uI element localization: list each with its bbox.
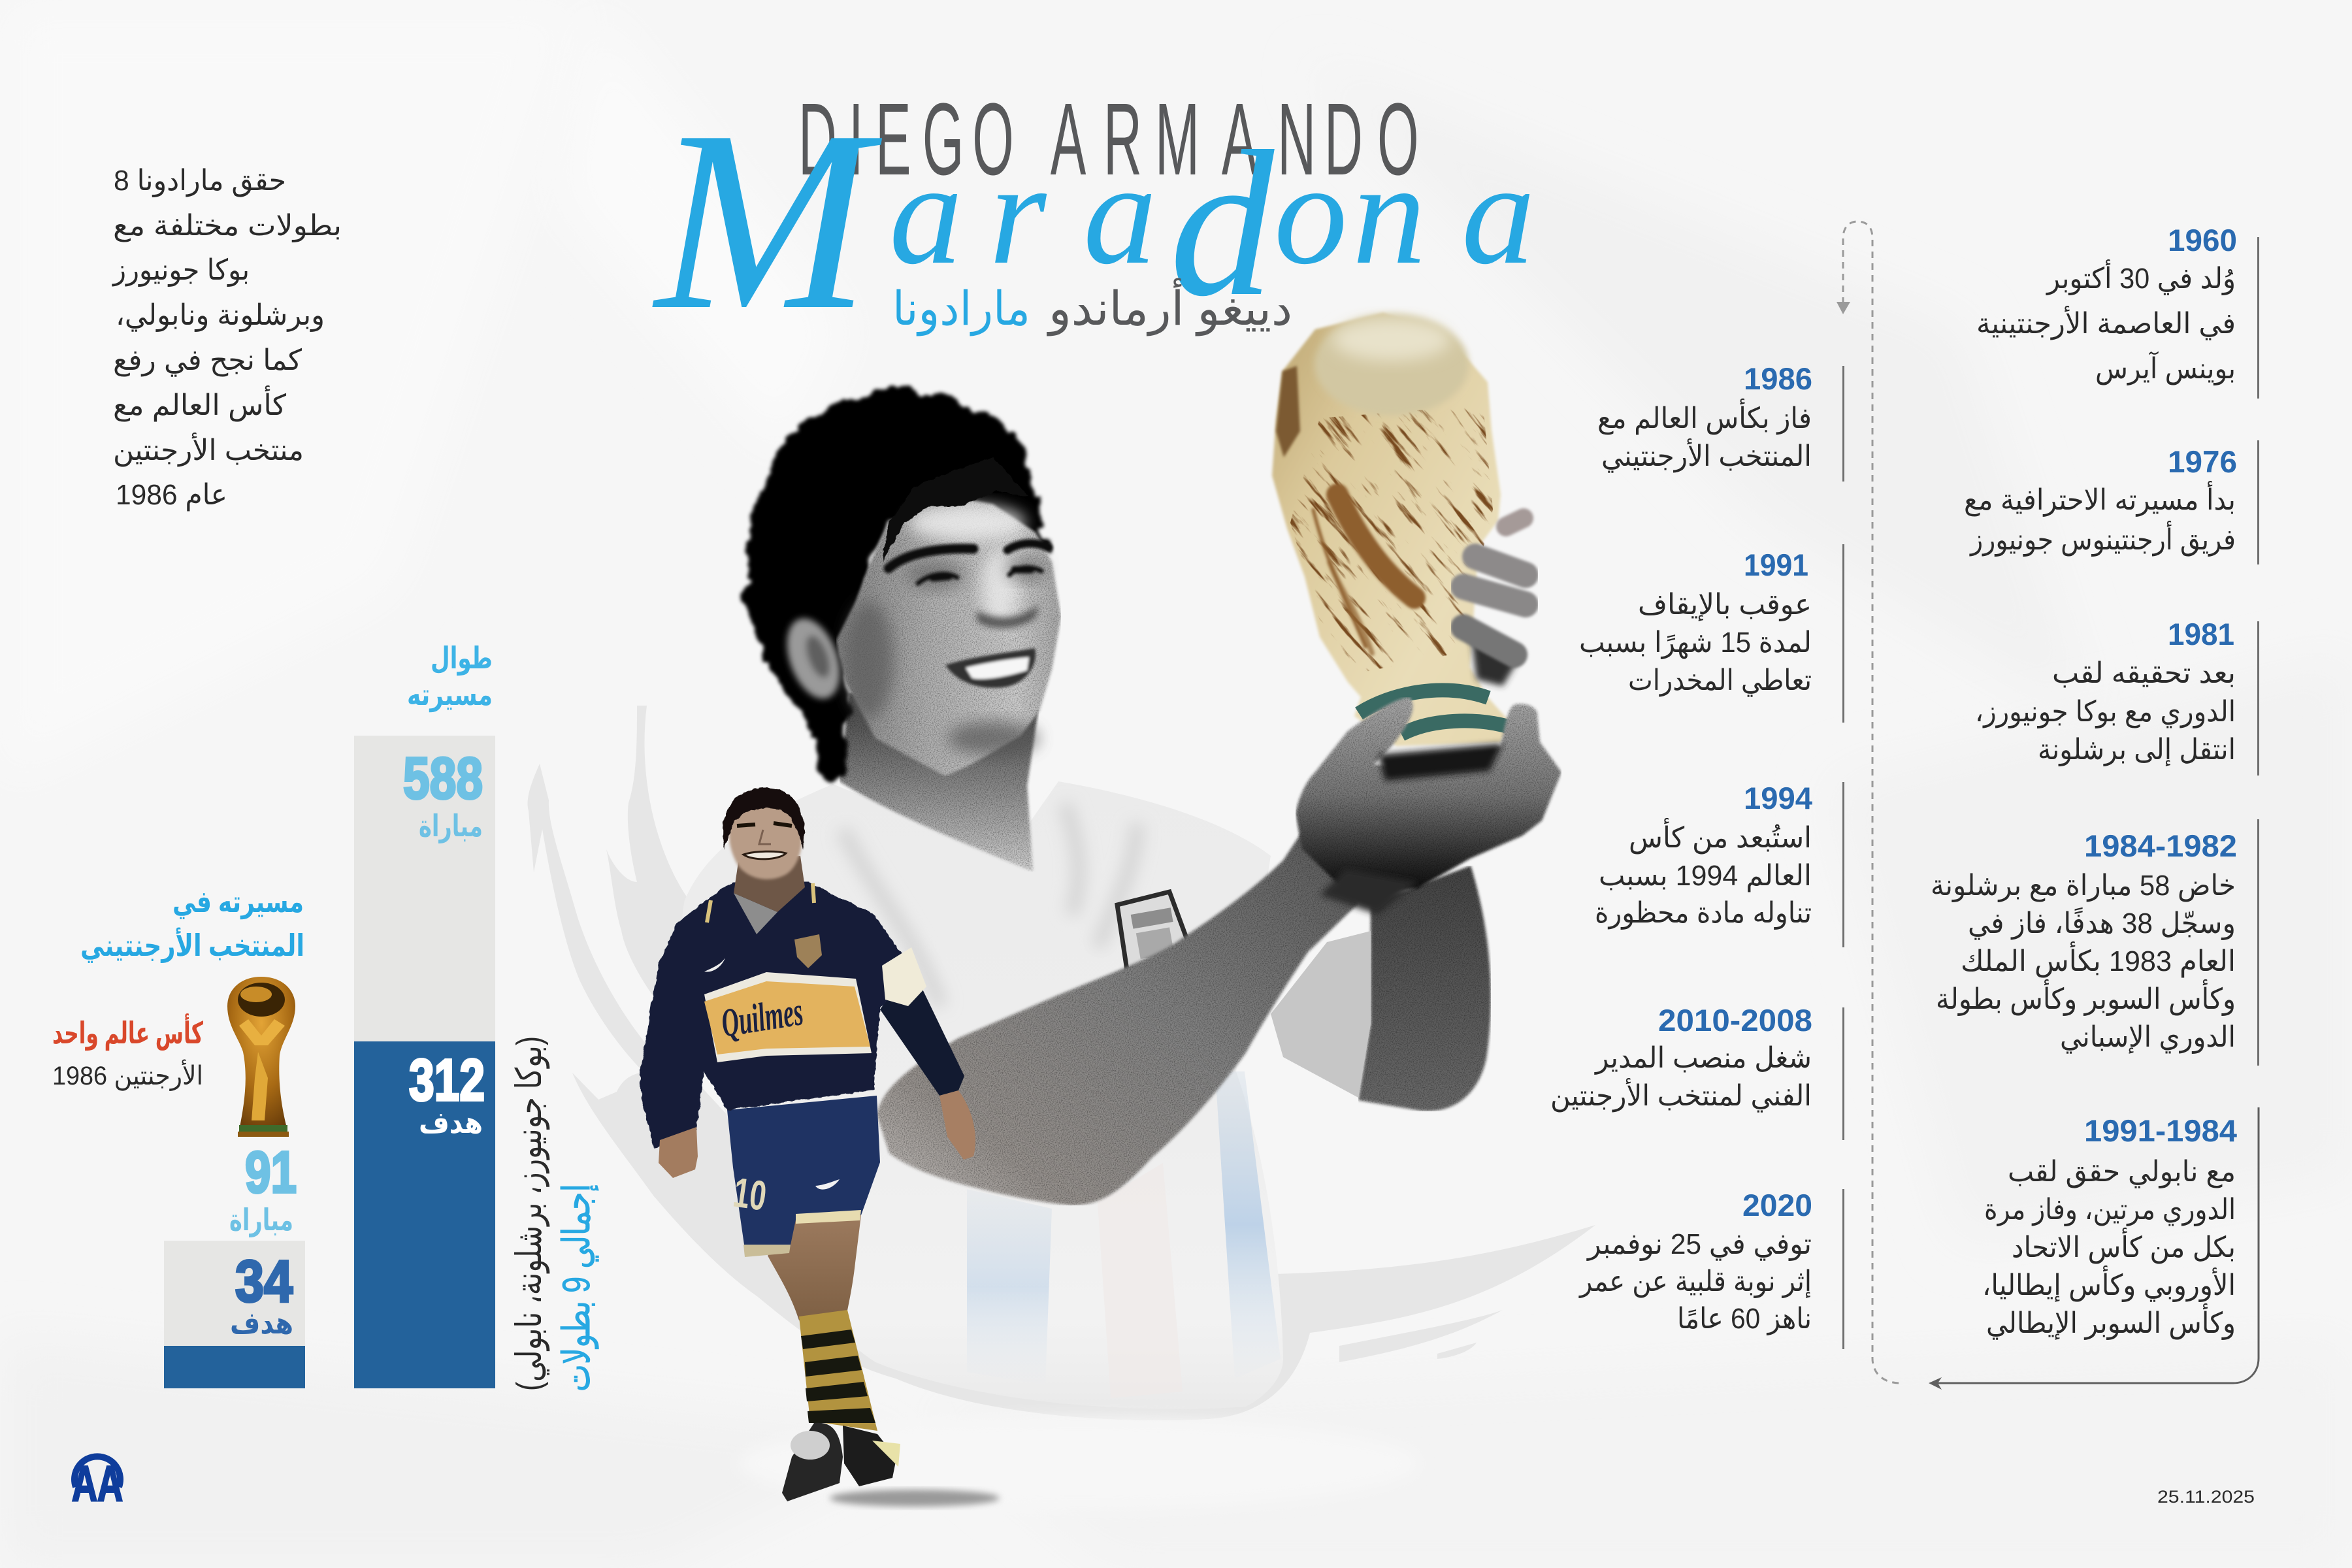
captain armband: [882, 947, 926, 1006]
heading: national team: مسيرته في: [172, 885, 304, 919]
item: 1994: 1994: [1744, 781, 1812, 815]
item: 1984-1982: وكأس السوبر وكأس بطولة: [1936, 979, 2236, 1016]
number 91: 91: [245, 1140, 297, 1205]
vertical text: clubs: (بوكا جونيورز، برشلونة، نابولي): [510, 1036, 549, 1391]
left hand: [659, 1127, 698, 1178]
short hem and number: 10: [730, 1169, 770, 1220]
back of hand behind fingers: [1470, 627, 1522, 686]
heading: national team: [80, 885, 304, 963]
logo: Anadolu Agency: AA: [72, 1456, 123, 1512]
label goals: هدف: [419, 1105, 483, 1139]
stats: whole career: [354, 641, 495, 1388]
brush swoosh: [528, 706, 1595, 1420]
shirt blue stripes: [967, 1071, 1281, 1398]
arrow head left: [1929, 1377, 1942, 1390]
bar: goals: [164, 1346, 305, 1388]
face shading: [844, 504, 1047, 755]
face: [836, 498, 1061, 776]
number 588: 588: [403, 746, 483, 811]
arrow head down: [1837, 302, 1850, 314]
ear: [777, 612, 850, 706]
shirt folds: [843, 804, 1137, 1006]
bar: goals: [354, 1041, 495, 1388]
intro paragraph: عام 1986: [116, 479, 227, 512]
item: 1981: الدوري مع بوكا جونيورز،: [1975, 696, 2236, 728]
boots: [782, 1423, 900, 1501]
hair small: [723, 788, 804, 849]
heading: whole career: طوال: [431, 641, 493, 676]
right forearm sleeve: [880, 966, 964, 1096]
item: 1991: [1579, 544, 1844, 723]
shadow under trophy base: [1379, 743, 1503, 781]
intro paragraph: كما نجح في رفع: [113, 344, 302, 377]
vertical text: total titles: إجمالي 9 بطولات: [555, 1184, 599, 1392]
trophy engraving: [1313, 495, 1414, 653]
title: Maradona script: d: [1169, 108, 1277, 340]
item: 2010-2008: الفني لمنتخب الأرجنتين: [1550, 1077, 1812, 1113]
item: 1991-1984: [1982, 1113, 2237, 1340]
trophy dark side: [1276, 366, 1300, 457]
item: 1976: بدأ مسيرته الاحترافية مع: [1964, 481, 2236, 517]
item: 2010-2008: [1550, 1003, 1844, 1140]
item: 1960: [1976, 223, 2259, 399]
item: 2010-2008: 2010-2008: [1658, 1003, 1812, 1037]
item: 1994: [1595, 781, 1844, 947]
main photo: Maradona lifting the trophy: [682, 305, 1625, 1409]
world cup trophy: [1158, 305, 1625, 773]
item: 1991: عوقب بالإيقاف: [1638, 589, 1812, 621]
forearm: [877, 832, 1358, 1205]
trophy veins: [1158, 305, 1625, 773]
intro paragraph: حقق مارادونا 8: [114, 165, 286, 197]
eyebrows and eyes: [889, 544, 1049, 583]
intro paragraph: منتخب الأرجنتين: [113, 432, 304, 467]
item: 1994: استُبعد من كأس: [1629, 817, 1812, 855]
item: 1981: انتقل إلى برشلونة: [2038, 734, 2236, 766]
jersey badge: [794, 934, 822, 968]
small photo: Maradona in Boca Juniors kit: [640, 788, 1000, 1507]
item: 1960: في العاصمة الأرجنتينية: [1976, 305, 2236, 340]
label goals: هدف: [230, 1306, 293, 1340]
intro paragraph: بطولات مختلفة مع: [113, 210, 342, 242]
shirt: [682, 781, 1283, 1409]
item: 1991-1984: بكل من كأس الاتحاد: [2012, 1227, 2236, 1264]
subtitle gray part: دييغو أرماندو: [1047, 278, 1292, 336]
item: 1960: وُلد في 30 أكتوبر: [2046, 259, 2236, 295]
intro paragraph: [112, 165, 342, 512]
mouth: [945, 648, 1036, 688]
item: 1994: تناوله مادة محظورة: [1595, 897, 1812, 930]
item: 2020: توفي في 25 نوفمبر: [1586, 1228, 1812, 1261]
title: DIEGO ARMANDO: DIEGOARMANDO: [798, 82, 1419, 197]
item: 1984-1982: العام 1983 بكأس الملك: [1961, 941, 2236, 978]
jersey: [640, 882, 911, 1148]
back wrist: [1320, 869, 1418, 915]
item: 1991: لمدة 15 شهرًا بسبب: [1579, 627, 1812, 659]
item: 2020: [1578, 1188, 1844, 1349]
title: Maradona script: M: [651, 78, 885, 363]
heading: national team: المنتخب الأرجنتيني: [80, 927, 304, 963]
white fade under shirt: [738, 1418, 1418, 1509]
neck: [840, 693, 1039, 872]
lower hand: [1296, 697, 1561, 892]
item: 1991: 1991: [1744, 547, 1808, 582]
item: 1984-1982: خاض 58 مباراة مع برشلونة: [1931, 870, 2236, 902]
nike swoosh: [704, 958, 725, 972]
item: 1981: [1975, 617, 2259, 776]
item: 1986: فاز بكأس العالم مع: [1597, 398, 1812, 435]
ground shadow: [830, 1490, 1000, 1507]
timeline connector: [1837, 221, 2259, 1390]
title: Maradona script: ona: [1274, 131, 1535, 295]
short hem and number: [730, 1169, 861, 1257]
timeline column: 1960 to 1991: [1931, 223, 2259, 1340]
number 34: 34: [235, 1249, 293, 1315]
jersey yellow band: [704, 972, 872, 1062]
fingers on trophy: [1463, 518, 1526, 655]
item: 2020: إثر نوبة قلبية عن عمر: [1578, 1266, 1812, 1298]
item: 1981: بعد تحقيقه لقب: [2052, 657, 2236, 689]
stats: national team: [52, 885, 305, 1388]
head small: [729, 805, 802, 879]
item: 1991-1984: 1991-1984: [2084, 1113, 2237, 1148]
subtitle blue part: مارادونا: [892, 283, 1030, 336]
label: Argentina 1986: الأرجنتين 1986: [52, 1059, 203, 1091]
right upper arm: [1358, 866, 1491, 1111]
collar: [707, 883, 814, 934]
icon: golden trophy: [227, 977, 295, 1137]
shorts: [727, 1096, 880, 1254]
item: 1991-1984: الدوري مرتين، وفاز مرة: [1984, 1194, 2236, 1226]
arrow: dashed path: [1843, 221, 1901, 1383]
subtitle arabic: [892, 278, 1292, 336]
shirt badge: [1117, 892, 1192, 970]
hair fringe: [882, 457, 1029, 562]
arrow: solid path: [1937, 1107, 2259, 1383]
jersey sponsor: Quilmes: [719, 989, 806, 1046]
item: 2020: ناهز 60 عامًا: [1677, 1303, 1812, 1335]
label matches: مباراة: [419, 809, 483, 843]
nose shadow: [977, 604, 1039, 629]
heading: whole career: مسيرته: [407, 678, 493, 712]
sock stripes: [799, 1310, 877, 1431]
item: 1960: 1960: [2168, 223, 2237, 257]
item: 1976: [1964, 440, 2259, 564]
title: Maradona script: ara: [889, 131, 1156, 295]
hair: [744, 388, 1049, 781]
face small: [737, 823, 792, 859]
item: 1984-1982: [1931, 819, 2259, 1066]
neck small: [734, 856, 805, 912]
intro paragraph: بوكا جونيورز: [112, 254, 250, 287]
item: 1984-1982: الدوري الإسباني: [2060, 1021, 2236, 1054]
label matches: مباراة: [229, 1203, 293, 1237]
item: 1991: تعاطي المخدرات: [1628, 664, 1812, 697]
heading: whole career: [407, 641, 493, 712]
date: 25.11.2025: [2157, 1487, 2255, 1507]
trophy globe: [1315, 314, 1469, 416]
intro paragraph: كأس العالم مع: [113, 385, 286, 422]
item: 1994: العالم 1994 بسبب: [1599, 860, 1812, 892]
item: 1984-1982: 1984-1982: [2084, 828, 2237, 863]
bar: matches: [354, 736, 495, 1041]
trophy base bands: [1359, 690, 1511, 734]
sleeve: [1271, 931, 1371, 1098]
item: 1960: بوينس آيرس: [2095, 351, 2236, 385]
item: 1986: [1597, 361, 1844, 482]
hand right: [939, 1090, 975, 1160]
bar: matches: [164, 1241, 305, 1346]
item: 1984-1982: وسجّل 38 هدفًا، فاز في: [1968, 907, 2236, 940]
item: 2010-2008: شغل منصب المدير: [1594, 1042, 1812, 1075]
intro paragraph: وبرشلونة ونابولي،: [116, 299, 325, 332]
item: 1991-1984: وكأس السوبر الإيطالي: [1986, 1303, 2236, 1340]
item: 1986: 1986: [1744, 361, 1812, 396]
leg: [768, 1215, 861, 1320]
item: 2020: 2020: [1742, 1188, 1812, 1222]
label: one world cup: كأس عالم واحد: [52, 1013, 203, 1051]
number 312: 312: [409, 1048, 485, 1113]
item: 1976: فريق أرجنتينوس جونيورز: [1969, 521, 2236, 557]
item: 1981: 1981: [2168, 617, 2234, 651]
item: 1991-1984: مع نابولي حقق لقب: [2008, 1156, 2236, 1188]
item: 1976: 1976: [2168, 444, 2237, 479]
item: 1991-1984: الأوروبي وكأس إيطاليا،: [1982, 1265, 2236, 1302]
timeline column: 1986 to 2020: [1550, 361, 1844, 1349]
item: 1986: المنتخب الأرجنتيني: [1601, 438, 1812, 473]
